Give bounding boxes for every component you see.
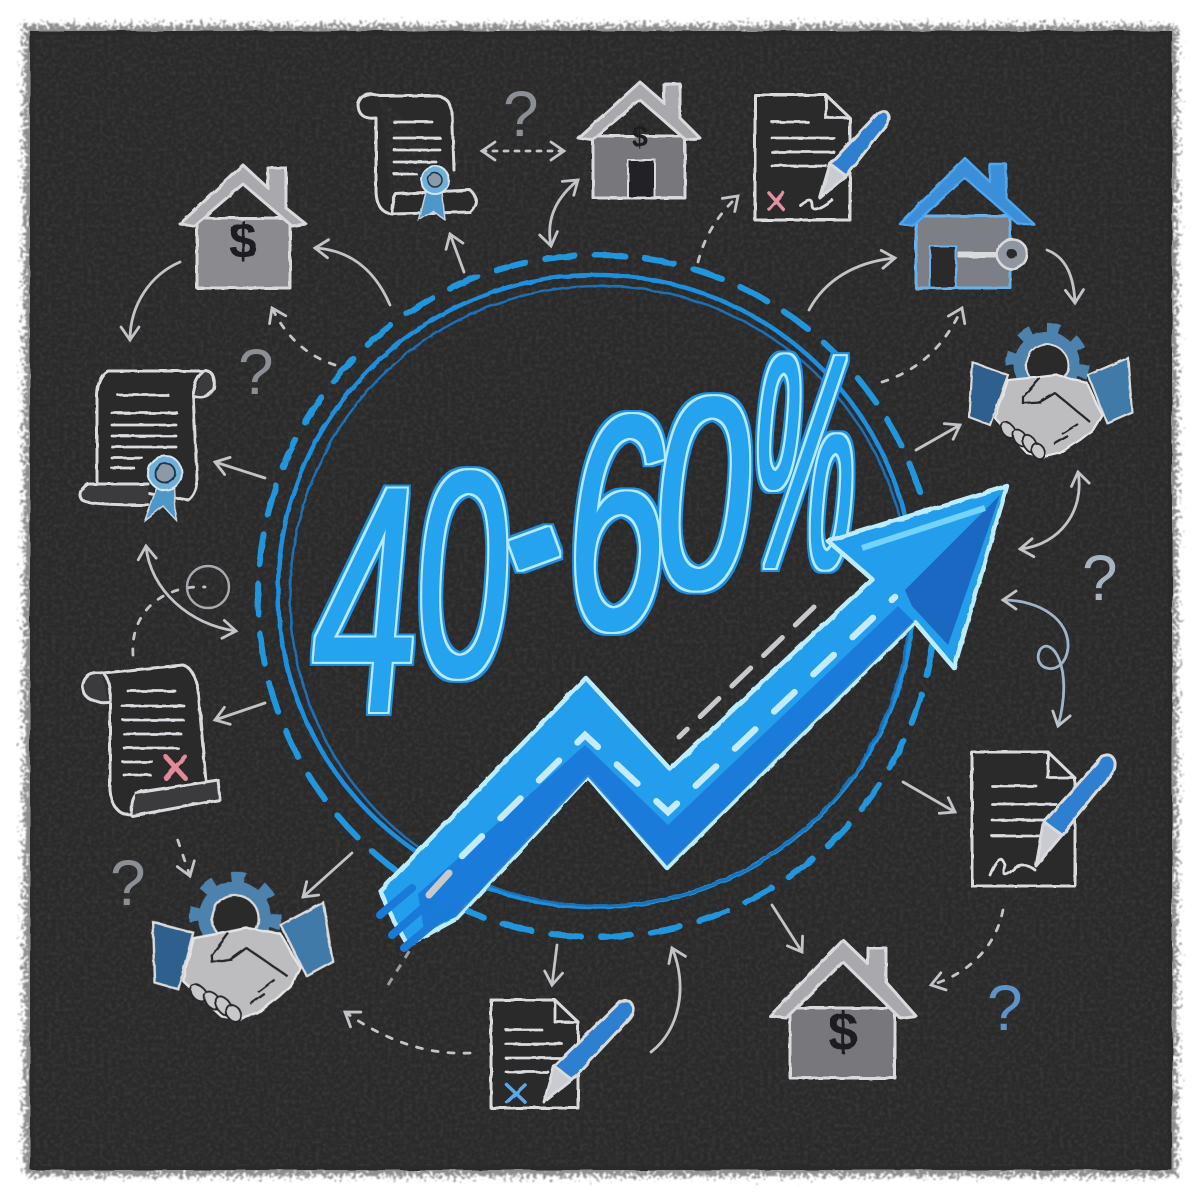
title: 40-60% figure: 0	[409, 411, 520, 737]
title: 40-60% figure: 4	[300, 419, 435, 779]
icon: document with pen and signature, right	[972, 752, 1115, 886]
icon: document with pen and red cross, top	[755, 95, 889, 220]
icon: house with dollar, lower right	[770, 940, 916, 1078]
icon: scroll with seal, top	[358, 94, 476, 220]
icon: scroll with seal, left	[80, 370, 214, 520]
question marks	[110, 78, 1118, 1044]
question marks: ?	[110, 847, 146, 919]
ring: sketched blue circles	[258, 255, 936, 937]
icon: house with key	[900, 158, 1034, 288]
icon: handshake with gear, right	[969, 328, 1132, 461]
question marks: ?	[1082, 542, 1118, 614]
icon: house with dollar, upper left	[180, 165, 306, 288]
icon: document with pen and blue cross, bottom	[491, 1000, 633, 1108]
growth arrow	[380, 486, 1007, 985]
icon: handshake with gear, lower left	[146, 869, 337, 1030]
icon: house with dollar, top: $	[632, 121, 649, 154]
arrows between icons	[130, 151, 1079, 1053]
question marks: ?	[503, 78, 539, 150]
icon: scroll with red cross, lower left	[82, 665, 220, 816]
title: 40-60% figure: 0	[643, 341, 767, 645]
question marks: ?	[238, 336, 274, 408]
title: 40-60% figure: 6	[555, 352, 683, 693]
icon: house with dollar, upper left: $	[229, 213, 257, 269]
title: 40-60% figure: -	[429, 321, 620, 721]
icon: house with dollar, top	[578, 82, 700, 198]
icon: house with dollar, lower right: $	[828, 1002, 858, 1062]
title: 40-60% figure	[300, 292, 872, 779]
question marks: ?	[987, 972, 1023, 1044]
title: 40-60% figure: %	[739, 292, 872, 633]
